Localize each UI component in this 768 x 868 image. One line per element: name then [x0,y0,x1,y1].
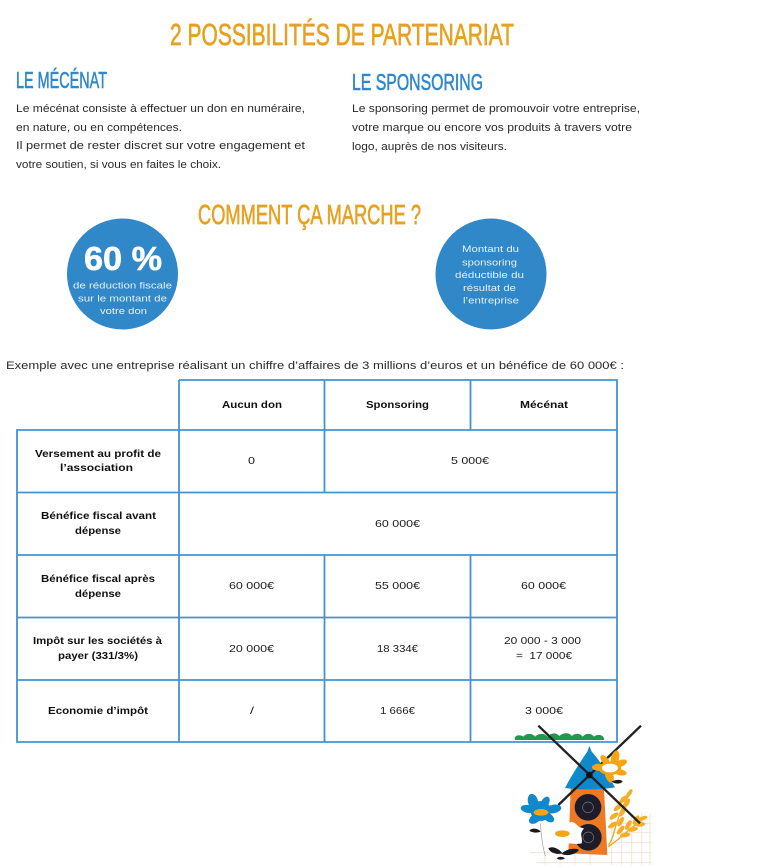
text: sponsoring description: votre marque ou encore vos produits à travers votre [352,122,632,134]
row: versement: l’association [60,462,133,474]
callout: sponsoring deductible: déductible du [455,270,524,281]
row: bénéfice avant dépense: Bénéfice fiscal avant [41,510,157,522]
row: économie: 3 000€ [525,705,563,717]
blades [538,726,641,823]
comparison table [17,380,617,742]
callout: 60 % reduction: de réduction fiscale [73,280,172,292]
text: sponsoring description: Le sponsoring permet de promouvoir votre entreprise, [352,103,640,115]
row: impôt: 18 334€ [377,643,418,655]
row: bénéfice après dépense: 55 000€ [375,580,420,592]
table header: Aucun don [222,399,282,411]
row: bénéfice après dépense: 60 000€ [521,580,566,592]
row: bénéfice avant dépense: 60 000€ [375,518,420,530]
orange flower [592,750,628,784]
heading: le mécénat: LE MÉCÉNAT [16,67,107,93]
callout: sponsoring deductible: l’entreprise [463,296,519,306]
illustration: windmill [515,726,652,865]
row: économie: Economie d’impôt [48,705,149,717]
callout: sponsoring deductible: sponsoring [462,258,517,268]
blue flower [520,793,562,856]
text: mécénat description: Le mécénat consiste à effectuer un don en numéraire, [16,103,305,115]
row: impôt: = 17 000€ [516,650,572,662]
white flower [542,822,584,860]
callout: 60 % reduction: sur le montant de [78,294,167,304]
row: impôt: payer (331/3%) [58,650,138,662]
row: versement [35,448,489,474]
grid background [530,813,652,865]
callout: 60 % reduction [67,218,178,330]
roof [565,746,615,789]
heading: le sponsoring: LE SPONSORING [352,69,483,95]
row: versement: 0 [248,455,255,467]
green hedge [515,733,604,740]
wheat [607,788,648,847]
table header: Sponsoring [366,399,429,411]
tower [568,788,607,855]
row: bénéfice après dépense: Bénéfice fiscal après [41,573,155,585]
table header: Mécénat [520,399,569,411]
row: bénéfice avant dépense [41,510,420,537]
panel: le sponsoring [352,69,640,153]
callout: sponsoring deductible: Montant du [462,244,519,255]
text: example intro: Exemple avec une entreprise réalisant un chiffre d’affaires de 3 millions d’euros et un bénéfice de 60 000€ : [6,360,624,372]
row: impôt: Impôt sur les sociétés à [33,635,162,647]
row: versement: 5 000€ [451,455,489,467]
row: bénéfice après dépense: dépense [75,588,121,600]
text: sponsoring description: logo, auprès de nos visiteurs. [352,141,507,153]
text: mécénat description: en nature, ou en compétences. [16,122,182,134]
row: bénéfice après dépense [41,573,566,600]
callout: sponsoring deductible [436,218,546,330]
table header [222,399,569,411]
callout: sponsoring deductible: résultat de [463,283,516,294]
text: mécénat description [16,103,305,171]
row: versement: Versement au profit de [35,448,161,460]
callout: 60 % reduction: 60 % [84,240,162,277]
panel: le mécénat [16,67,305,171]
callout: 60 % reduction: votre don [100,306,147,317]
row: économie: / [250,705,254,717]
row: économie: 1 666€ [380,705,415,717]
text: sponsoring description [352,103,640,153]
row: bénéfice après dépense: 60 000€ [229,580,274,592]
text: mécénat description: Il permet de rester discret sur votre engagement et [16,140,305,152]
row: économie [48,705,563,717]
heading: comment ça marche: COMMENT ÇA MARCHE ? [198,199,421,230]
windows [575,794,602,851]
text: mécénat description: votre soutien, si vous en faites le choix. [16,159,221,171]
title: 2 POSSIBILITÉS DE PARTENARIAT [170,17,514,52]
row: bénéfice avant dépense: dépense [75,525,121,537]
row: impôt: 20 000€ [229,643,274,655]
row: impôt: 20 000 - 3 000 [504,635,581,647]
row: impôt [33,635,581,662]
